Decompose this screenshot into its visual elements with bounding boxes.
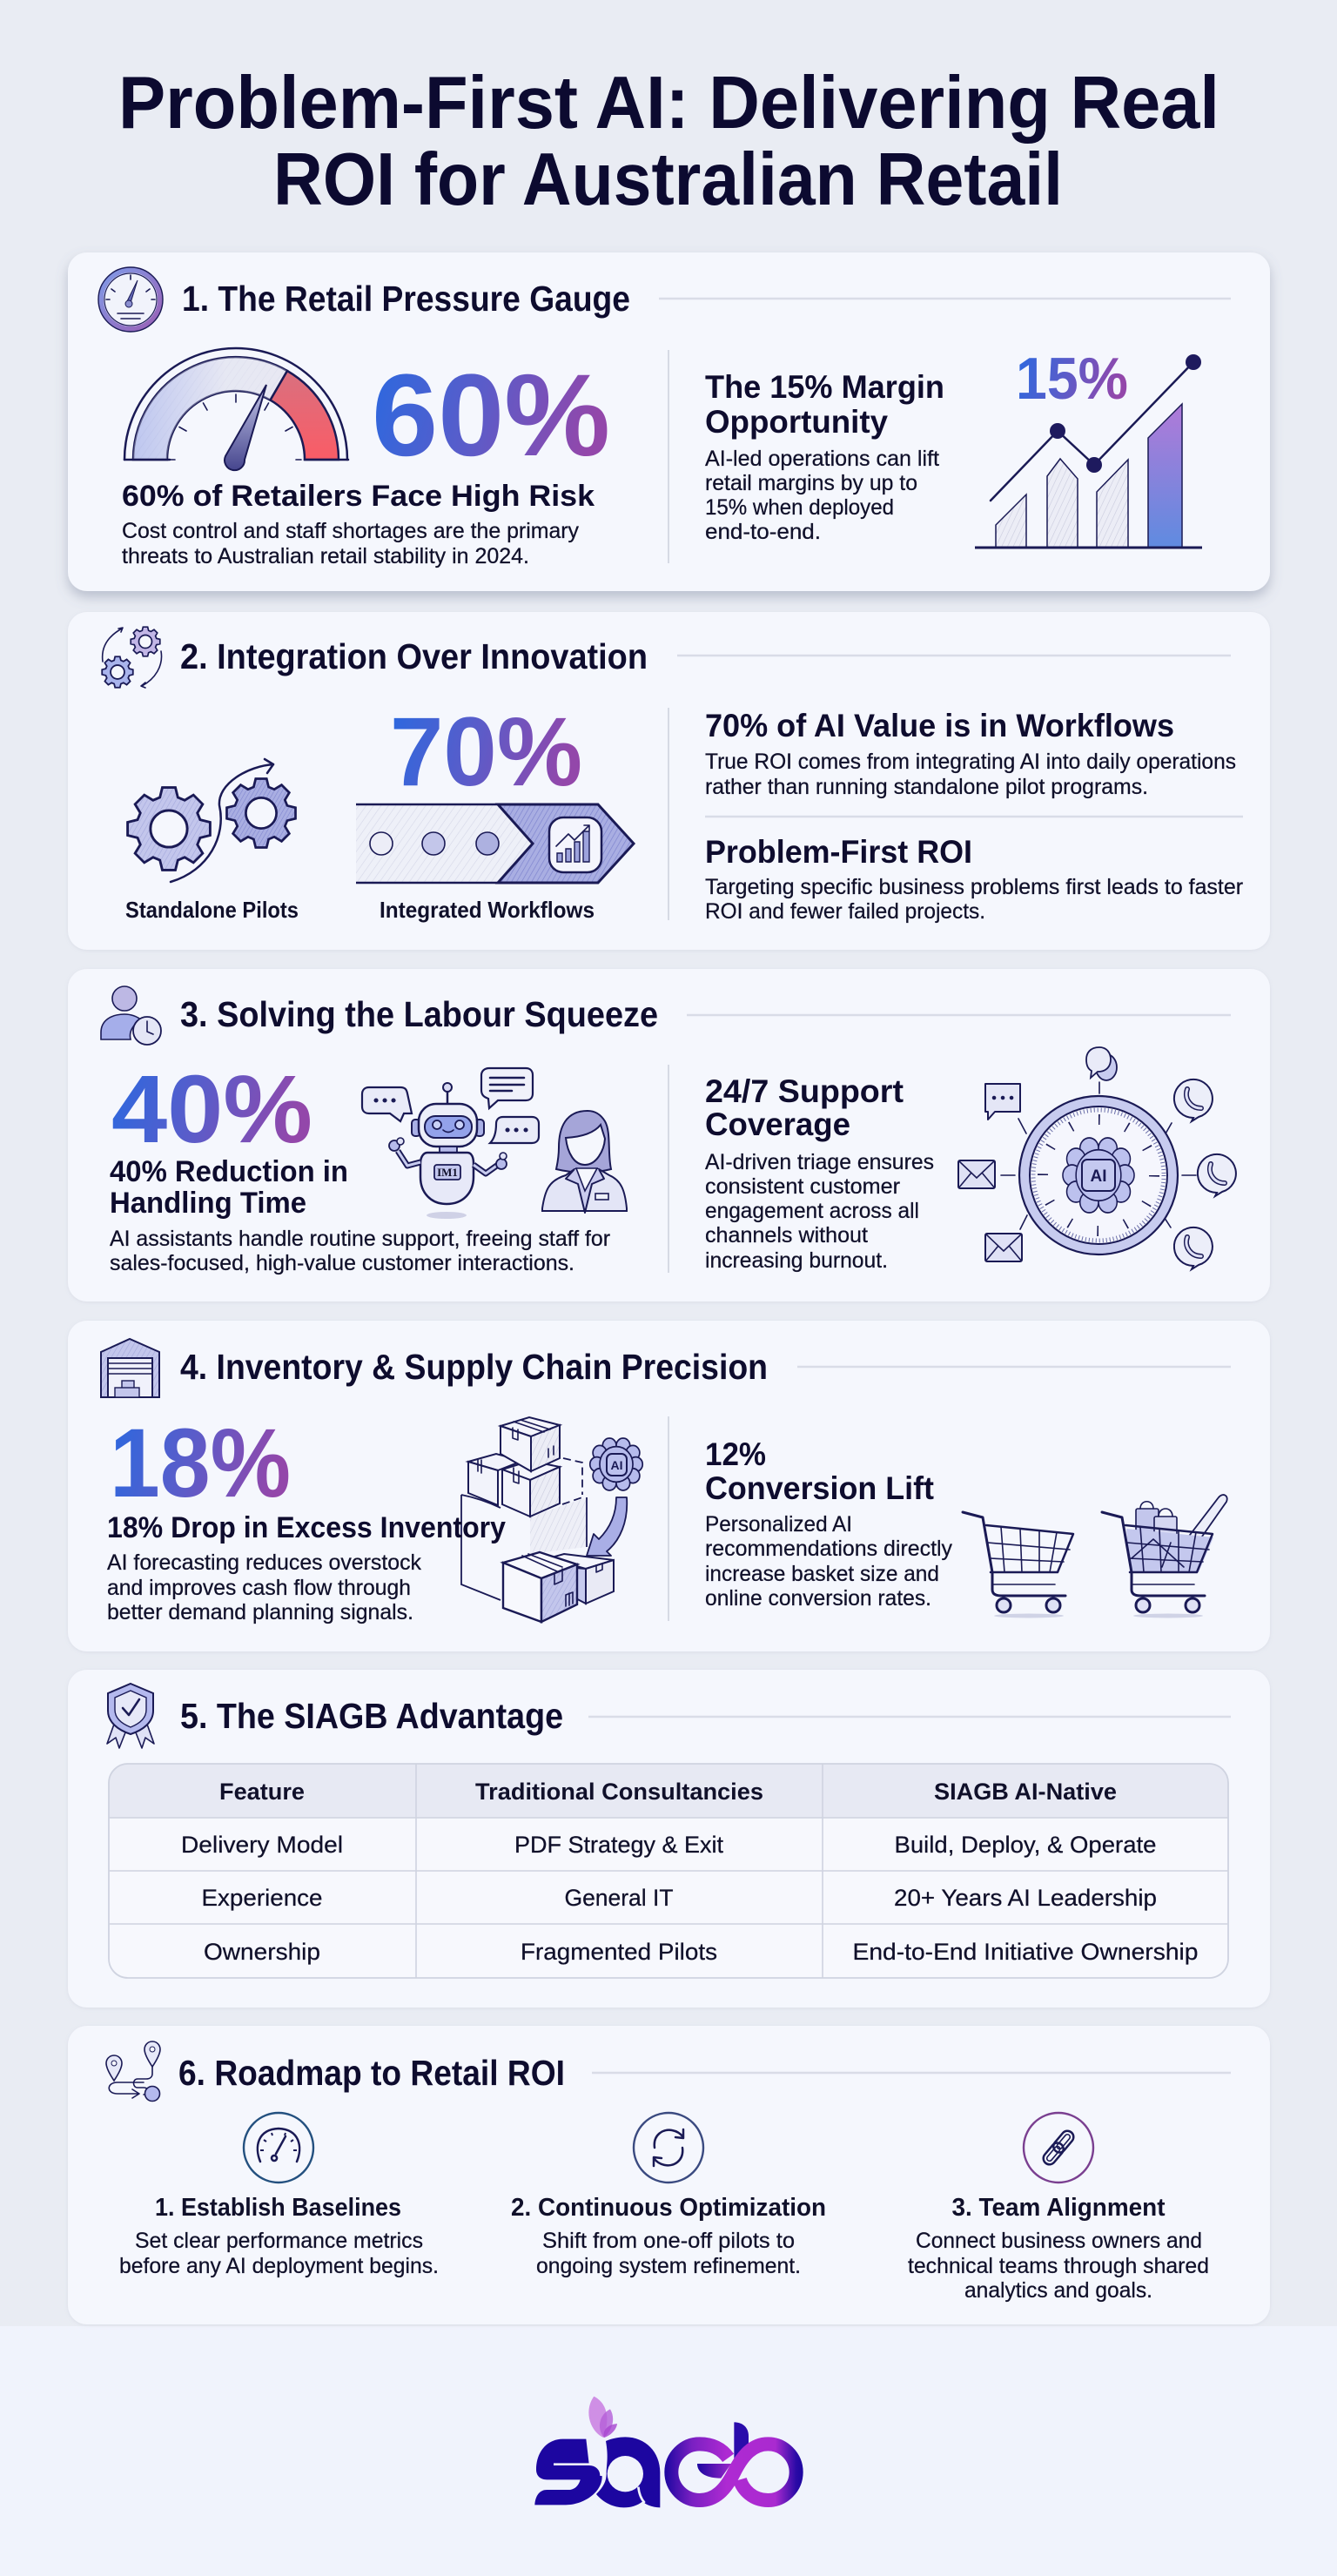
step 2: 2. Continuous Optimization <box>511 2194 826 2222</box>
illustration: boxes and AI forecast: AI <box>611 1458 623 1472</box>
label: Standalone Pilots <box>125 897 299 923</box>
text block: AI-driven triage ensures <box>705 1150 934 1174</box>
illustration: AI clock hub: AI <box>1090 1167 1107 1186</box>
subheading: The 15% Margin <box>705 369 944 405</box>
heading: 5. The SIAGB Advantage <box>180 1696 563 1736</box>
heading: 2. Integration Over Innovation <box>180 636 648 676</box>
title <box>118 62 1219 221</box>
comparison table: Delivery Model <box>181 1832 343 1858</box>
logo: siagb <box>534 2397 796 2507</box>
comparison table: SIAGB AI-Native <box>934 1779 1117 1805</box>
text block: better demand planning signals. <box>107 1600 413 1624</box>
step 2: ongoing system refinement. <box>536 2254 801 2278</box>
comparison table: Traditional Consultancies <box>475 1779 763 1805</box>
comparison table: Feature <box>219 1779 305 1805</box>
step 3: Connect business owners and <box>916 2229 1202 2253</box>
text block <box>705 1150 934 1273</box>
chart: gauge dial <box>124 348 348 470</box>
text block <box>110 1227 610 1275</box>
icon: gears <box>102 627 162 688</box>
icon: chain link <box>1024 2113 1093 2183</box>
label: Integrated Workflows <box>380 897 595 923</box>
subheading: Coverage <box>705 1106 850 1142</box>
text block: ROI and fewer failed projects. <box>705 899 985 924</box>
icon: chat left <box>985 1084 1020 1120</box>
comparison table: Fragmented Pilots <box>521 1939 717 1965</box>
icon: chat bubble top <box>481 1068 533 1108</box>
text block <box>705 1512 952 1611</box>
icon: person and clock <box>101 986 161 1045</box>
icon: phone bottom right <box>1174 1227 1213 1269</box>
icon: chat top <box>1086 1047 1117 1080</box>
comparison table: General IT <box>564 1885 674 1911</box>
text block: Personalized AI <box>705 1512 852 1537</box>
text block <box>122 519 579 568</box>
panel: 4. Inventory and Supply Chain Precision <box>68 1321 1270 1651</box>
subheading: Problem-First ROI <box>705 834 972 870</box>
text block <box>705 875 1243 924</box>
step 1: Set clear performance metrics <box>135 2229 423 2253</box>
subheading: Opportunity <box>705 404 888 440</box>
illustration: boxes and AI forecast <box>461 1417 642 1622</box>
subheading: 70% of AI Value is in Workflows <box>705 708 1174 743</box>
icon: envelope left <box>958 1160 995 1188</box>
heading: 3. Solving the Labour Squeeze <box>180 994 658 1034</box>
icon: gauge <box>98 267 163 332</box>
step 3 <box>908 2113 1209 2303</box>
text block: AI-led operations can lift <box>705 447 939 471</box>
subheading: 12% <box>705 1436 766 1472</box>
text block: True ROI comes from integrating AI into daily operations <box>705 750 1236 774</box>
illustration: robot: IM1 <box>437 1166 458 1179</box>
comparison table: 20+ Years AI Leadership <box>894 1885 1157 1911</box>
heading: 4. Inventory & Supply Chain Precision <box>180 1347 768 1387</box>
step 2: Shift from one-off pilots to <box>542 2229 795 2253</box>
icon: chat bubble right <box>490 1117 539 1143</box>
text block: increase basket size and <box>705 1562 939 1586</box>
icon: warehouse <box>101 1339 159 1397</box>
icon: refresh cycle <box>634 2113 703 2183</box>
text block: threats to Australian retail stability in 2024. <box>122 544 529 568</box>
text block: sales-focused, high-value customer interactions. <box>110 1251 574 1275</box>
comparison table: Build, Deploy, & Operate <box>895 1832 1156 1858</box>
panel: 2. Integration Over Innovation <box>68 612 1270 950</box>
icon: chat bubble left <box>362 1087 412 1121</box>
stat: 18%: 18% <box>110 1409 291 1517</box>
text block: consistent customer <box>705 1174 900 1199</box>
comparison table: PDF Strategy & Exit <box>514 1832 723 1858</box>
text block: engagement across all <box>705 1199 919 1223</box>
subheading: Conversion Lift <box>705 1470 934 1506</box>
icon: speedometer <box>244 2113 313 2183</box>
icon: shield badge <box>107 1684 154 1748</box>
subheading <box>705 1436 934 1506</box>
text block: online conversion rates. <box>705 1586 931 1611</box>
text block <box>705 750 1236 799</box>
panel: 5. The SIAGB Advantage <box>68 1670 1270 2008</box>
step 2 <box>511 2113 826 2278</box>
text block <box>107 1550 421 1624</box>
comparison table <box>109 1764 1228 1978</box>
panel: 6. Roadmap to Retail ROI <box>68 2026 1270 2324</box>
stat: 40%: 40% <box>111 1056 312 1163</box>
comparison table: End-to-End Initiative Ownership <box>853 1939 1198 1965</box>
text block <box>705 447 939 544</box>
text block: increasing burnout. <box>705 1248 888 1273</box>
heading: 6. Roadmap to Retail ROI <box>178 2053 565 2093</box>
icon: empty cart <box>963 1512 1073 1618</box>
icon: full cart <box>1102 1495 1227 1618</box>
icon: phone top right <box>1174 1079 1213 1121</box>
step 3: analytics and goals. <box>964 2278 1152 2303</box>
text block: rather than running standalone pilot programs. <box>705 775 1148 799</box>
subheading <box>110 1155 348 1220</box>
illustration: AI clock hub <box>1001 1082 1196 1254</box>
panel: 1. The Retail Pressure Gauge <box>68 252 1270 591</box>
icon: phone right <box>1198 1154 1236 1196</box>
title: Problem-First AI: Delivering Real <box>118 62 1219 145</box>
arrow: integrated workflow <box>356 804 634 883</box>
footer band <box>0 2326 1337 2576</box>
icon: envelope bottom left <box>985 1234 1022 1261</box>
text block: channels without <box>705 1223 868 1248</box>
text block: Targeting specific business problems first leads to faster <box>705 875 1243 899</box>
subheading: 40% Reduction in <box>110 1155 348 1188</box>
stat: 60%: 60% <box>372 351 610 481</box>
chart: rising bars <box>975 354 1202 548</box>
text block: AI forecasting reduces overstock <box>107 1550 421 1575</box>
step 1 <box>119 2113 439 2278</box>
heading: 1. The Retail Pressure Gauge <box>182 279 630 319</box>
text block: 15% when deployed <box>705 495 894 520</box>
text block: end-to-end. <box>705 520 821 544</box>
panel: 3. Solving the Labour Squeeze <box>68 969 1270 1301</box>
text block: recommendations directly <box>705 1537 952 1561</box>
subheading: 60% of Retailers Face High Risk <box>122 480 595 513</box>
text block: retail margins by up to <box>705 471 917 495</box>
subheading <box>705 1073 904 1142</box>
text block: and improves cash flow through <box>107 1576 411 1600</box>
step 3: technical teams through shared <box>908 2254 1209 2278</box>
comparison table: Experience <box>202 1885 322 1911</box>
subheading: 18% Drop in Excess Inventory <box>107 1511 506 1544</box>
comparison table: Ownership <box>204 1939 320 1965</box>
subheading: Handling Time <box>110 1187 306 1220</box>
illustration: staff member <box>542 1111 627 1213</box>
text block: Cost control and staff shortages are the primary <box>122 519 579 543</box>
subheading <box>705 369 944 440</box>
step 3: 3. Team Alignment <box>952 2194 1166 2222</box>
text block: AI assistants handle routine support, freeing staff for <box>110 1227 610 1251</box>
step 1: 1. Establish Baselines <box>155 2194 401 2222</box>
step 1: before any AI deployment begins. <box>119 2254 439 2278</box>
icon: roadmap pins <box>106 2041 160 2102</box>
icon: standalone gears <box>128 759 296 882</box>
title: ROI for Australian Retail <box>273 138 1063 221</box>
subheading: 24/7 Support <box>705 1073 904 1109</box>
stat: 70%: 70% <box>390 697 582 806</box>
illustration: robot <box>389 1083 507 1219</box>
stat: 15%: 15% <box>1016 346 1128 412</box>
